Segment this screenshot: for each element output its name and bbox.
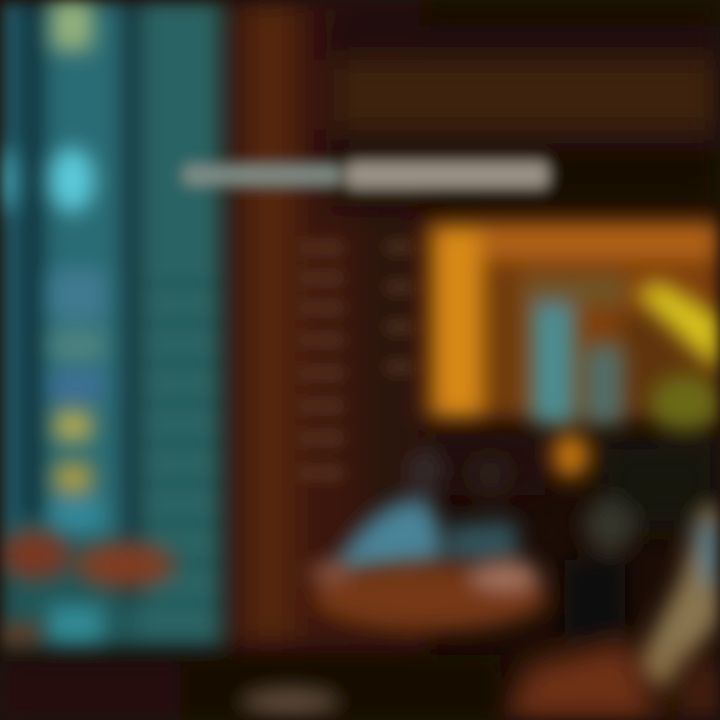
bottom light patch	[240, 688, 340, 716]
right chair stripe	[635, 503, 720, 690]
window pane highlights	[0, 0, 105, 643]
yellow light streak	[635, 282, 720, 372]
bottom dark band	[0, 655, 500, 720]
panel: orange lit alcove	[425, 220, 720, 478]
bottom right floor	[500, 640, 720, 720]
alcove window panes	[525, 275, 625, 425]
orange lamp glow	[548, 434, 592, 478]
right seated figure	[565, 497, 636, 645]
left table	[0, 531, 175, 645]
panel: dark upper wall	[325, 0, 720, 205]
striped wood column	[300, 240, 413, 481]
panel: wood wall centre	[222, 0, 427, 660]
green foliage glow	[651, 375, 719, 435]
seated person	[330, 446, 520, 575]
centre table	[308, 561, 548, 631]
dark lower band	[425, 435, 720, 530]
blurred title bar	[182, 160, 550, 190]
window blinds stripes	[142, 280, 220, 606]
panel: teal window wall	[0, 0, 222, 650]
